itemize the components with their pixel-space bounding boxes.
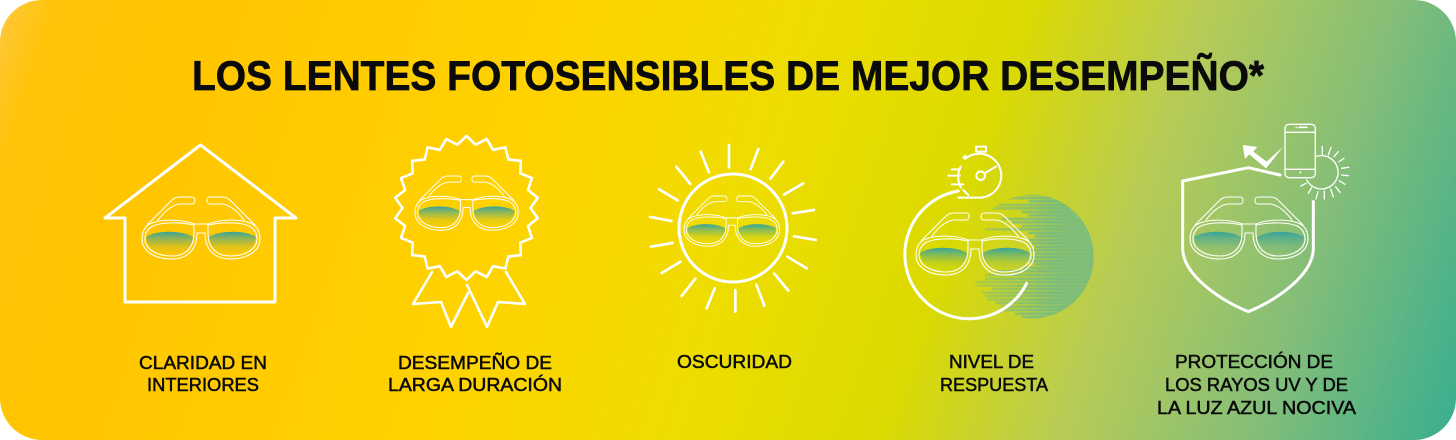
icon: stopwatch and response speed with glasses [905, 147, 1095, 320]
icon: sun with glasses [650, 145, 816, 312]
label: oscuridad: OSCURIDAD [677, 351, 792, 372]
label: desempeño de larga duración: LARGA DURACIÓN [388, 374, 562, 395]
label: protección de los rayos uv y de la luz azul nociva [1157, 351, 1357, 418]
label: desempeño de larga duración [388, 352, 562, 395]
label: nivel de respuesta: RESPUESTA [940, 374, 1049, 395]
label: claridad en interiores [139, 352, 267, 395]
icon: award badge with glasses [395, 136, 538, 327]
label: nivel de respuesta [940, 351, 1049, 395]
label: desempeño de larga duración: DESEMPEÑO DE [398, 352, 552, 373]
label: protección de los rayos uv y de la luz azul nociva: LA LUZ AZUL NOCIVA [1157, 397, 1357, 418]
label: claridad en interiores: CLARIDAD EN [139, 352, 267, 373]
label: protección de los rayos uv y de la luz azul nociva: PROTECCIÓN DE [1175, 351, 1333, 372]
title: LOS LENTES FOTOSENSIBLES DE MEJOR DESEMPEÑO* [192, 52, 1265, 99]
label: claridad en interiores: INTERIORES [147, 374, 259, 395]
label: protección de los rayos uv y de la luz azul nociva: LOS RAYOS UV Y DE [1165, 374, 1348, 395]
icon: house with glasses [105, 145, 296, 302]
label: nivel de respuesta: NIVEL DE [949, 351, 1034, 372]
icon: shield with phone, sun, arrow and glasses [1183, 124, 1349, 312]
